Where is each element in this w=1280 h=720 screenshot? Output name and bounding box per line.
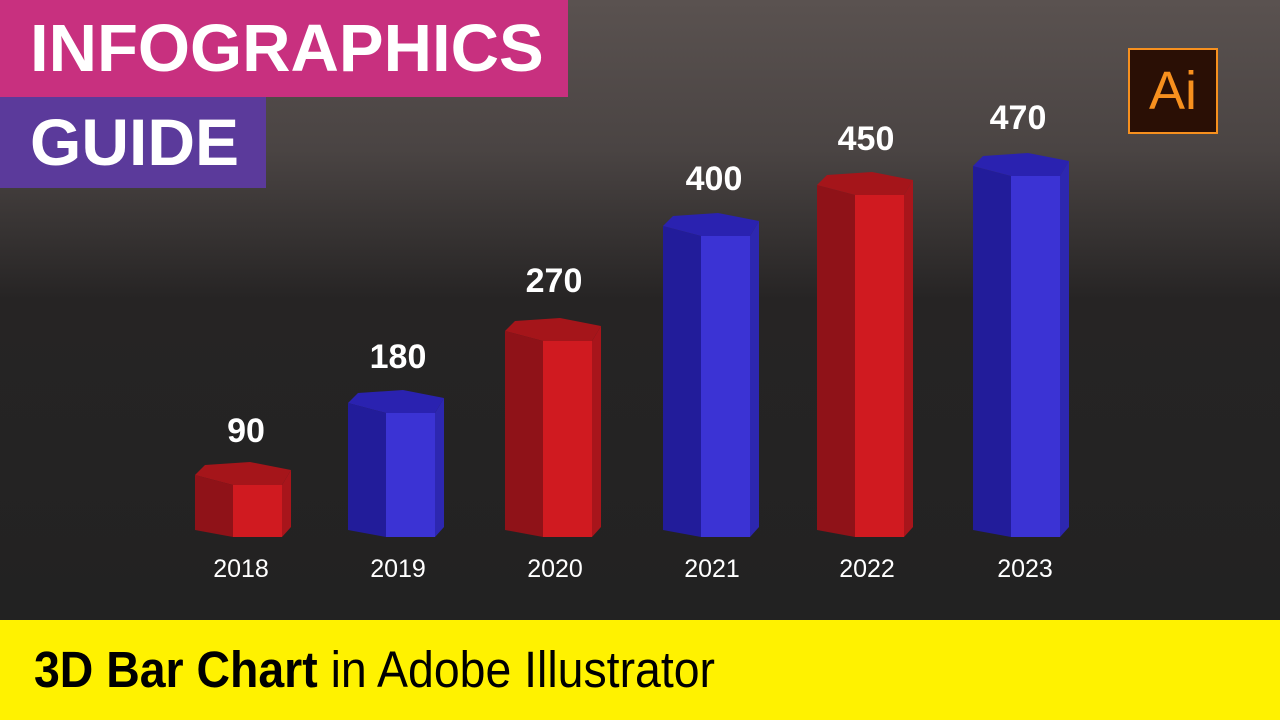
title: guide: GUIDE [30,105,239,179]
bar 2022: 450 [838,120,894,158]
subtitle: 3D Bar Chart in Adobe Illustrator [34,641,715,698]
year labels: 2019 [370,555,426,583]
bar 2023 [973,99,1069,537]
title: infographics: INFOGRAPHICS [30,11,544,86]
year labels: 2022 [839,555,895,583]
title: infographics [0,0,568,97]
bar 2022 [817,120,913,537]
year labels: 2018 [213,555,269,583]
year labels: 2020 [527,555,583,583]
bar 2021 [663,160,759,537]
footer banner [0,620,1280,720]
bar 2019 [348,338,444,537]
bar 2019: 180 [370,338,426,376]
year labels: 2021 [684,555,740,583]
bar 2023: 470 [990,99,1046,137]
bar 2018 [195,412,291,537]
bar 2021: 400 [686,160,742,198]
icon: Adobe Illustrator logo [1128,48,1218,134]
year labels [213,555,1053,583]
bar 2020 [505,262,601,537]
bar 2018: 90 [227,412,265,450]
bar 2020: 270 [526,262,582,300]
year labels: 2023 [997,555,1053,583]
title: guide [0,97,266,188]
icon: Adobe Illustrator logo: Ai [1149,61,1197,121]
